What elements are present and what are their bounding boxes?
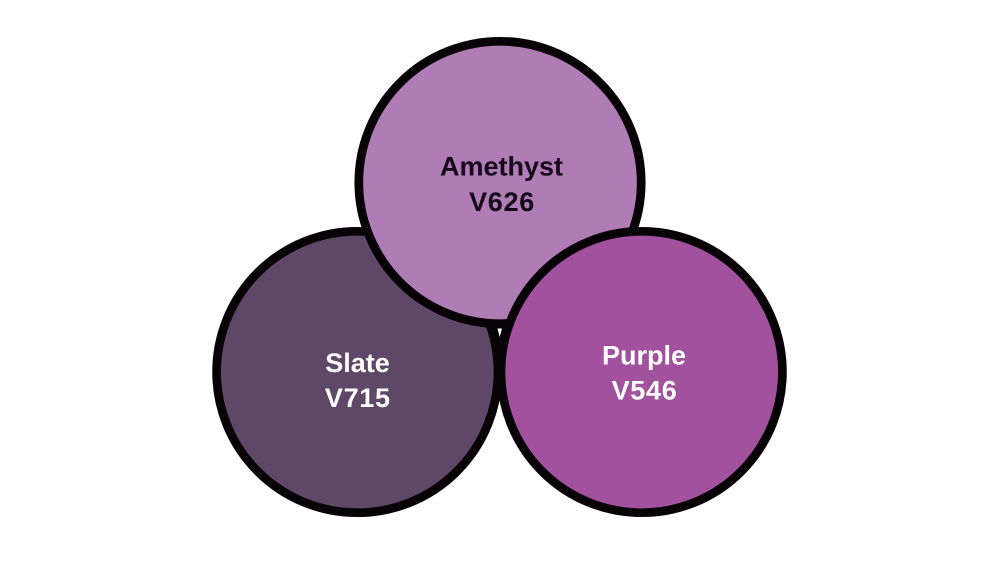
label: Purple V546: Purple [602,340,686,370]
label: Purple V546 [602,340,686,406]
label: Purple V546: V546 [612,376,677,406]
circle: Purple swatch [501,231,782,513]
label: Slate V715 [325,348,391,413]
label: Amethyst V626: Amethyst [440,152,563,182]
label: Slate V715: Slate [325,348,390,378]
circle: Slate swatch [217,231,498,513]
label: Slate V715: V715 [325,383,391,413]
label: Amethyst V626 [440,152,563,217]
label: Amethyst V626: V626 [469,187,535,217]
circle: Amethyst swatch [359,41,641,324]
